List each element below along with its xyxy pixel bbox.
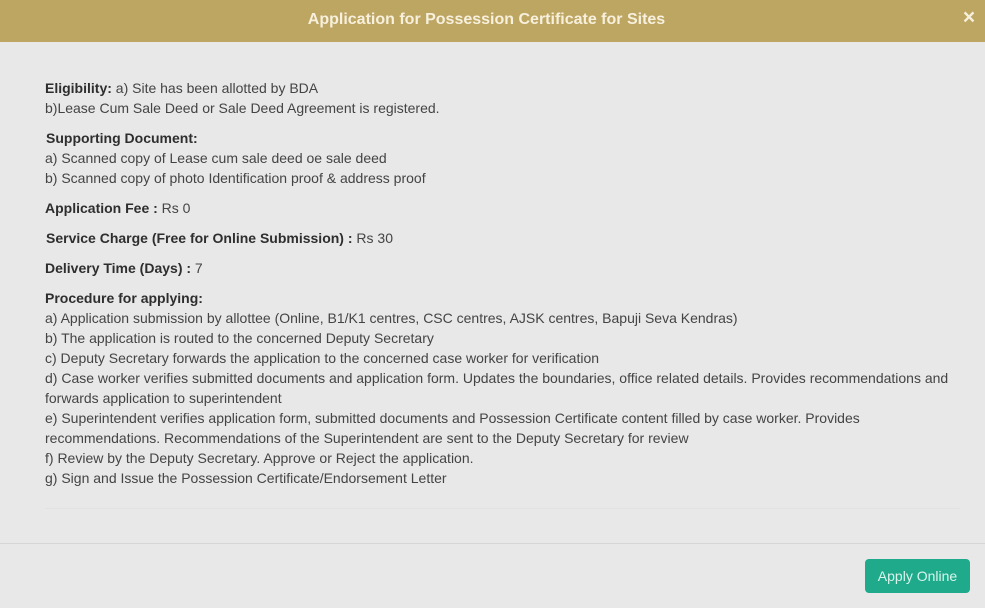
procedure for applying: f) Review by the Deputy Secretary. Approve or Reject the application. <box>45 450 474 466</box>
modal header bar <box>0 0 985 42</box>
eligibility text: b)Lease Cum Sale Deed or Sale Deed Agreement is registered. <box>45 100 440 116</box>
supporting document text: a) Scanned copy of Lease cum sale deed oe sale deed <box>45 150 387 166</box>
delivery time: Delivery Time (Days) : 7 <box>45 260 203 276</box>
procedure for applying <box>45 290 948 486</box>
procedure for applying: a) Application submission by allottee (Online, B1/K1 centres, CSC centres, AJSK centres, Bapuji Seva Kendras) <box>45 310 738 326</box>
eligibility text: Eligibility: a) Site has been allotted by BDA <box>45 80 318 96</box>
procedure for applying: e) Superintendent verifies application form, submitted documents and Possession Certificate content filled by case worker. Provides <box>45 410 860 426</box>
eligibility text <box>45 80 440 116</box>
supporting document text: Supporting Document: <box>46 130 198 146</box>
procedure for applying: g) Sign and Issue the Possession Certificate/Endorsement Letter <box>45 470 447 486</box>
supporting document text <box>45 130 426 186</box>
procedure for applying: forwards application to superintendent <box>45 390 282 406</box>
button: apply online: Apply Online <box>878 568 957 584</box>
procedure for applying: recommendations. Recommendations of the Superintendent are sent to the Deputy Secretary for review <box>45 430 689 446</box>
procedure for applying: d) Case worker verifies submitted documents and application form. Updates the boundaries, office related details. Provides recommendations and <box>45 370 948 386</box>
service charge: Service Charge (Free for Online Submission) : Rs 30 <box>46 230 393 246</box>
icon: close: × <box>963 6 975 29</box>
procedure for applying: Procedure for applying: <box>45 290 203 306</box>
title: Application for Possession Certificate for Sites <box>308 11 665 28</box>
button: apply online <box>865 559 970 593</box>
procedure for applying: c) Deputy Secretary forwards the application to the concerned case worker for verification <box>45 350 599 366</box>
application fee: Application Fee : Rs 0 <box>45 200 190 216</box>
supporting document text: b) Scanned copy of photo Identification proof & address proof <box>45 170 426 186</box>
procedure for applying: b) The application is routed to the concerned Deputy Secretary <box>45 330 434 346</box>
